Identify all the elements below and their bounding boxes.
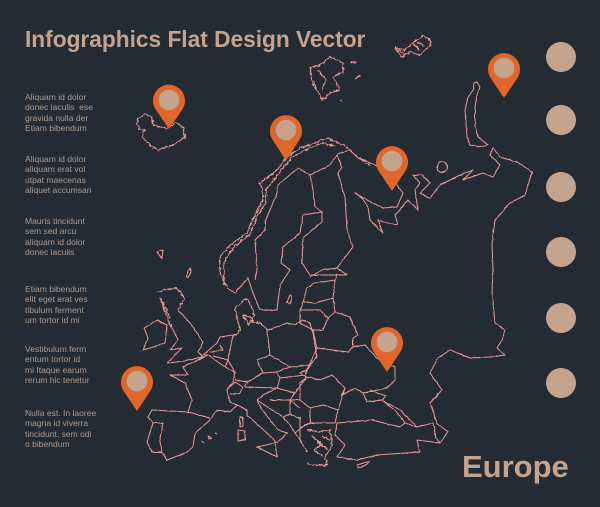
- text block 3: aliquam id dolor: [25, 237, 85, 247]
- text block 5: entum tortor id: [25, 354, 80, 364]
- Balearic islands: [202, 433, 217, 443]
- pin: Norway: [270, 115, 302, 160]
- text block 2: utpat maecenas: [25, 175, 86, 185]
- Black Sea south and Turkey: [335, 400, 440, 460]
- text block 3: [25, 216, 86, 257]
- text block 4: [25, 284, 88, 325]
- Germany south and central Europe: [227, 355, 310, 400]
- Greek islands: [300, 430, 332, 465]
- text block 6: o bibendum: [25, 439, 70, 449]
- pin: Ukraine: [371, 327, 403, 372]
- pin: Iceland: [153, 85, 185, 129]
- Svalbard: [310, 57, 361, 102]
- Pyrenees and Portugal: [153, 412, 210, 452]
- Gulf of Bothnia: [248, 212, 347, 310]
- title: Infographics Flat Design Vector: [25, 26, 365, 52]
- text block 3: sem sed arcu: [25, 226, 76, 236]
- main outlines: [143, 82, 532, 468]
- text block 2: aliquam erat vol: [25, 164, 85, 174]
- pin: Kola: [376, 146, 408, 191]
- pin: Arctic: [488, 53, 520, 98]
- circle column: [546, 42, 576, 398]
- text block 6: Nulla est. In laoree: [25, 408, 96, 418]
- text block 4: um tortor id mi: [25, 315, 80, 325]
- Ireland: [143, 320, 167, 350]
- Finland-Russia border: [337, 155, 353, 268]
- Balkan borders: [257, 395, 310, 440]
- France and Iberia coast: [147, 355, 287, 460]
- Faroe and Shetland: [157, 250, 191, 278]
- region label: Europe: [462, 449, 569, 484]
- Denmark: [235, 298, 260, 335]
- text block 1: donec iaculis ese: [25, 102, 93, 112]
- Low countries and German coast: [203, 320, 317, 367]
- Kolguev: [437, 162, 447, 172]
- Arctic and rugged coasts: [137, 36, 431, 465]
- Ukraine: [300, 345, 395, 402]
- Sardinia and Corsica: [238, 417, 245, 441]
- text block 6: magna id viverra: [25, 418, 88, 428]
- France east border: [208, 355, 237, 405]
- text block 4: elit eget erat ves: [25, 294, 88, 304]
- Novaya Zemlya: [465, 82, 488, 147]
- text block 1: [25, 92, 93, 133]
- Norway south: [227, 278, 248, 293]
- text block 2: [25, 154, 92, 195]
- text block 1: Aliquam id dolor: [25, 92, 86, 102]
- text block 2: Aliquam id dolor: [25, 154, 86, 164]
- text block 3: donec iaculis: [25, 247, 74, 257]
- text block 1: Etiam bibendum: [25, 123, 87, 133]
- text block 4: tibulum ferment: [25, 305, 84, 315]
- text block 4: Etiam bibendum: [25, 284, 87, 294]
- Scotland coast: [157, 288, 185, 328]
- text block 5: mi Itaque earum: [25, 365, 87, 375]
- Franz Josef Land: [395, 36, 431, 57]
- Sweden-Finland border: [310, 175, 322, 212]
- text block 5: Vestibulum ferm: [25, 344, 86, 354]
- Norway coast skerries: [224, 143, 335, 285]
- text block 6: [25, 408, 96, 449]
- Norway-Sweden border: [255, 155, 337, 280]
- Romania Bulgaria: [300, 377, 345, 440]
- map of Europe: [137, 36, 532, 468]
- Russia northern and eastern border: [337, 148, 532, 443]
- Cyprus: [357, 461, 370, 468]
- Norway coast: [220, 138, 370, 288]
- text block 3: Mauris tincidunt: [25, 216, 85, 226]
- text block 1: gravida nulla der: [25, 113, 88, 123]
- Gotland: [287, 295, 292, 304]
- text block 2: aliquet accumsan: [25, 185, 92, 195]
- text block 5: rerum hic tenetur: [25, 375, 90, 385]
- Sicily: [257, 443, 277, 457]
- text block 6: tincidunt, sem odi: [25, 429, 92, 439]
- text block 5: [25, 344, 90, 385]
- Iceland: [137, 114, 185, 150]
- Baltic states: [300, 275, 358, 352]
- pin: Portugal: [121, 366, 153, 411]
- Great Britain: [167, 310, 203, 363]
